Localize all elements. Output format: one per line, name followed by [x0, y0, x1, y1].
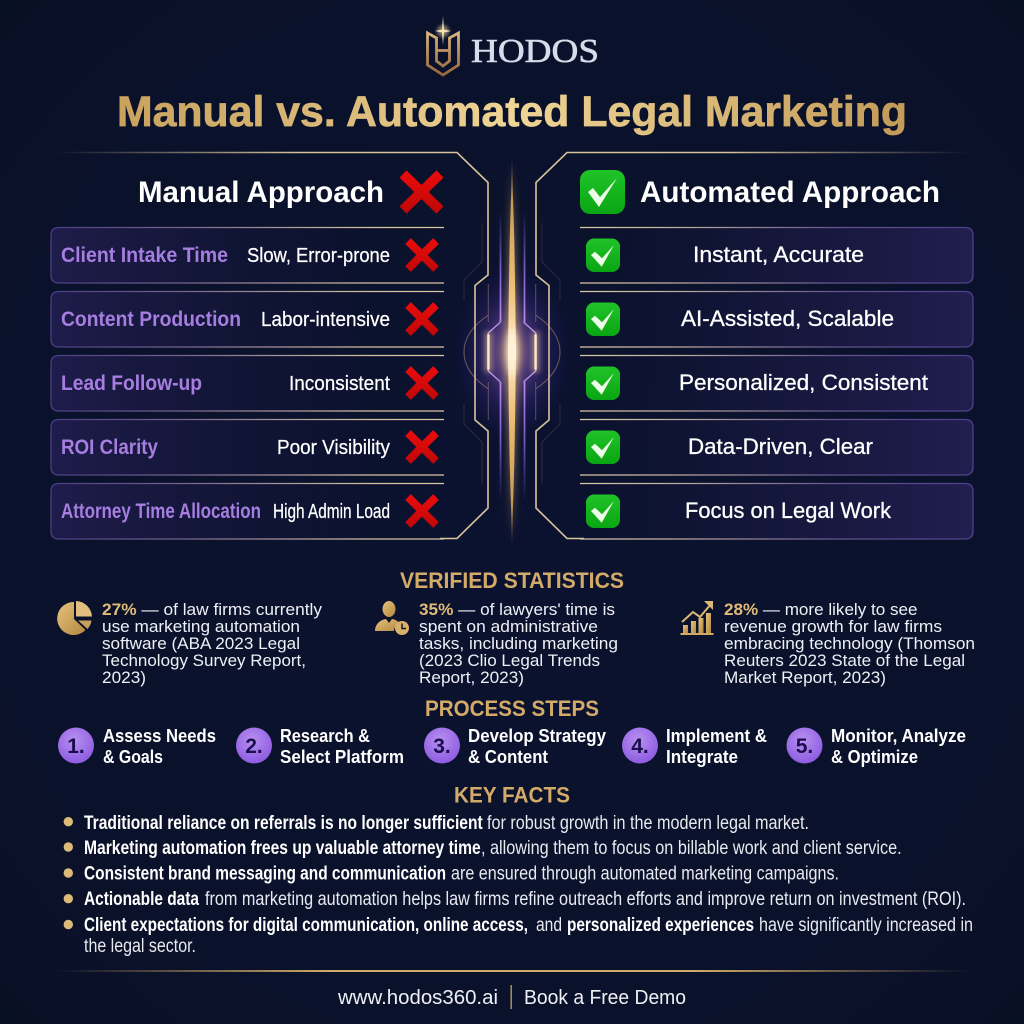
step 1: & Goals — [103, 746, 163, 767]
step 5: 5. — [796, 735, 813, 758]
row: content production, manual — [51, 292, 444, 347]
statistic: 27 percent: use marketing automation — [102, 618, 300, 636]
statistic: 35 percent: Report, 2023) — [419, 669, 524, 687]
icon: green check — [586, 238, 620, 272]
icon: rising bar chart — [680, 601, 714, 635]
statistic: 35 percent: (2023 Clio Legal Trends — [419, 652, 600, 670]
icon: green check — [586, 494, 620, 528]
statistic: 28 percent: Reuters 2023 State of the Legal — [724, 652, 965, 670]
row: client intake time, manual — [51, 228, 444, 283]
row: content production, manual: Labor-intensive — [261, 308, 390, 331]
step 1: 1. — [67, 735, 85, 758]
statistic: 27 percent: 27% — of law firms currently — [102, 601, 323, 619]
step 3: 3. — [433, 735, 451, 758]
heading: process steps: PROCESS STEPS — [425, 696, 599, 721]
heading: verified statistics: VERIFIED STATISTICS — [400, 568, 624, 593]
fact 3: are ensured through automated marketing campaigns. — [451, 864, 839, 884]
fact 5: personalized experiences — [567, 915, 754, 936]
step 2 — [236, 725, 404, 767]
step 1: Assess Needs — [103, 725, 216, 746]
icon: pie chart — [57, 601, 92, 635]
icon: green check — [586, 366, 620, 400]
wordmark: HODOS — [471, 33, 599, 70]
row: attorney time allocation, manual — [51, 484, 444, 539]
row: roi clarity, manual — [51, 420, 444, 475]
icon: red cross — [408, 305, 436, 333]
fact 5: have significantly increased in — [759, 915, 973, 936]
icon: red cross — [408, 241, 436, 269]
step 4: 4. — [631, 735, 649, 758]
icon: green check — [586, 302, 620, 336]
heading: key facts: KEY FACTS — [454, 782, 570, 808]
icon: big red cross — [403, 174, 440, 210]
row: attorney time allocation, automated: Focus on Legal Work — [685, 498, 892, 523]
footer: Book a Free Demo — [524, 987, 686, 1009]
heading: automated approach — [580, 170, 940, 214]
icon: red cross — [408, 433, 436, 461]
fact 4: Actionable data — [84, 889, 199, 910]
row: roi clarity, manual: Poor Visibility — [277, 436, 391, 459]
fact 2: Marketing automation frees up valuable attorney time — [84, 838, 481, 859]
statistic: 28 percent: embracing technology (Thomson — [724, 635, 975, 653]
step 3: Develop Strategy — [468, 725, 607, 746]
statistic: 35 percent — [375, 601, 618, 687]
statistic: 35 percent: tasks, including marketing — [419, 635, 618, 653]
panel: automated approach frame — [536, 152, 970, 538]
fact 5: Client expectations for digital communication, online access, — [84, 915, 528, 936]
statistic: 27 percent: software (ABA 2023 Legal — [102, 635, 300, 653]
key facts list — [64, 813, 973, 957]
step 2: Research & — [280, 725, 370, 746]
footer — [337, 985, 686, 1009]
step 3 — [424, 725, 607, 767]
statistic: 35 percent: spent on administrative — [419, 618, 598, 636]
row: client intake time, automated — [580, 228, 973, 283]
step 4: Integrate — [666, 746, 738, 767]
row: roi clarity, automated — [580, 420, 973, 475]
row: lead follow-up, manual: Lead Follow-up — [61, 371, 202, 395]
central glowing beam — [454, 155, 570, 548]
fact 1 — [64, 813, 809, 834]
icon: green check — [586, 430, 620, 464]
heading: automated approach: Automated Approach — [640, 176, 940, 209]
row: lead follow-up, manual: Inconsistent — [289, 372, 390, 395]
heading: manual approach: Manual Approach — [138, 176, 384, 209]
icon: big green check — [580, 170, 625, 214]
fact 2 — [64, 838, 902, 859]
step 4: Implement & — [666, 725, 767, 746]
row: attorney time allocation, manual: Attorney Time Allocation — [61, 499, 261, 523]
fact 3 — [64, 864, 839, 884]
step 2: Select Platform — [280, 746, 404, 767]
row: lead follow-up, automated — [580, 356, 973, 411]
icon: red cross — [408, 369, 436, 397]
statistic: 27 percent — [57, 601, 323, 687]
statistic: 28 percent: 28% — more likely to see — [724, 601, 918, 619]
statistic: 28 percent: Market Report, 2023) — [724, 669, 886, 687]
step 1 — [58, 725, 216, 767]
row: content production, manual: Content Production — [61, 307, 241, 331]
icon: red cross — [408, 497, 436, 525]
fact 5: the legal sector. — [84, 936, 196, 957]
logo: Hodos — [428, 16, 599, 75]
statistic: 35 percent: 35% — of lawyers' time is — [419, 601, 615, 619]
row: attorney time allocation, manual: High Admin Load — [273, 500, 390, 523]
statistic: 28 percent — [680, 601, 975, 687]
row: attorney time allocation, automated — [580, 484, 973, 539]
statistic: 27 percent: 2023) — [102, 669, 146, 687]
icon: shield with star — [428, 16, 458, 75]
step 5 — [786, 725, 966, 767]
fact 1: for robust growth in the modern legal market. — [487, 813, 809, 834]
row: roi clarity, manual: ROI Clarity — [61, 435, 158, 459]
row: roi clarity, automated: Data-Driven, Clear — [688, 434, 873, 459]
step 2: 2. — [245, 735, 263, 758]
row: lead follow-up, automated: Personalized, Consistent — [679, 370, 928, 395]
footer: www.hodos360.ai — [337, 987, 498, 1009]
row: content production, automated: AI-Assisted, Scalable — [681, 306, 894, 331]
row: client intake time, automated: Instant, Accurate — [693, 242, 864, 267]
step 5: Monitor, Analyze — [831, 725, 966, 746]
fact 5: and — [536, 915, 562, 936]
step 5: & Optimize — [831, 746, 918, 767]
fact 1: Traditional reliance on referrals is no longer sufficient — [84, 813, 483, 834]
row: client intake time, manual: Slow, Error-prone — [247, 244, 390, 267]
panel: manual approach frame — [55, 152, 488, 538]
icon: lawyer with clock — [375, 601, 409, 635]
row: lead follow-up, manual — [51, 356, 444, 411]
fact 5 — [64, 915, 973, 957]
statistic: 27 percent: Technology Survey Report, — [102, 652, 306, 670]
statistic: 28 percent: revenue growth for law firms — [724, 618, 942, 636]
row: client intake time, manual: Client Intake Time — [61, 243, 228, 267]
fact 2: , allowing them to focus on billable work and client service. — [481, 838, 902, 859]
step 3: & Content — [468, 746, 548, 767]
fact 3: Consistent brand messaging and communication — [84, 864, 446, 884]
step 4 — [622, 725, 767, 767]
row: content production, automated — [580, 292, 973, 347]
title: Manual vs. Automated Legal Marketing — [117, 88, 907, 136]
